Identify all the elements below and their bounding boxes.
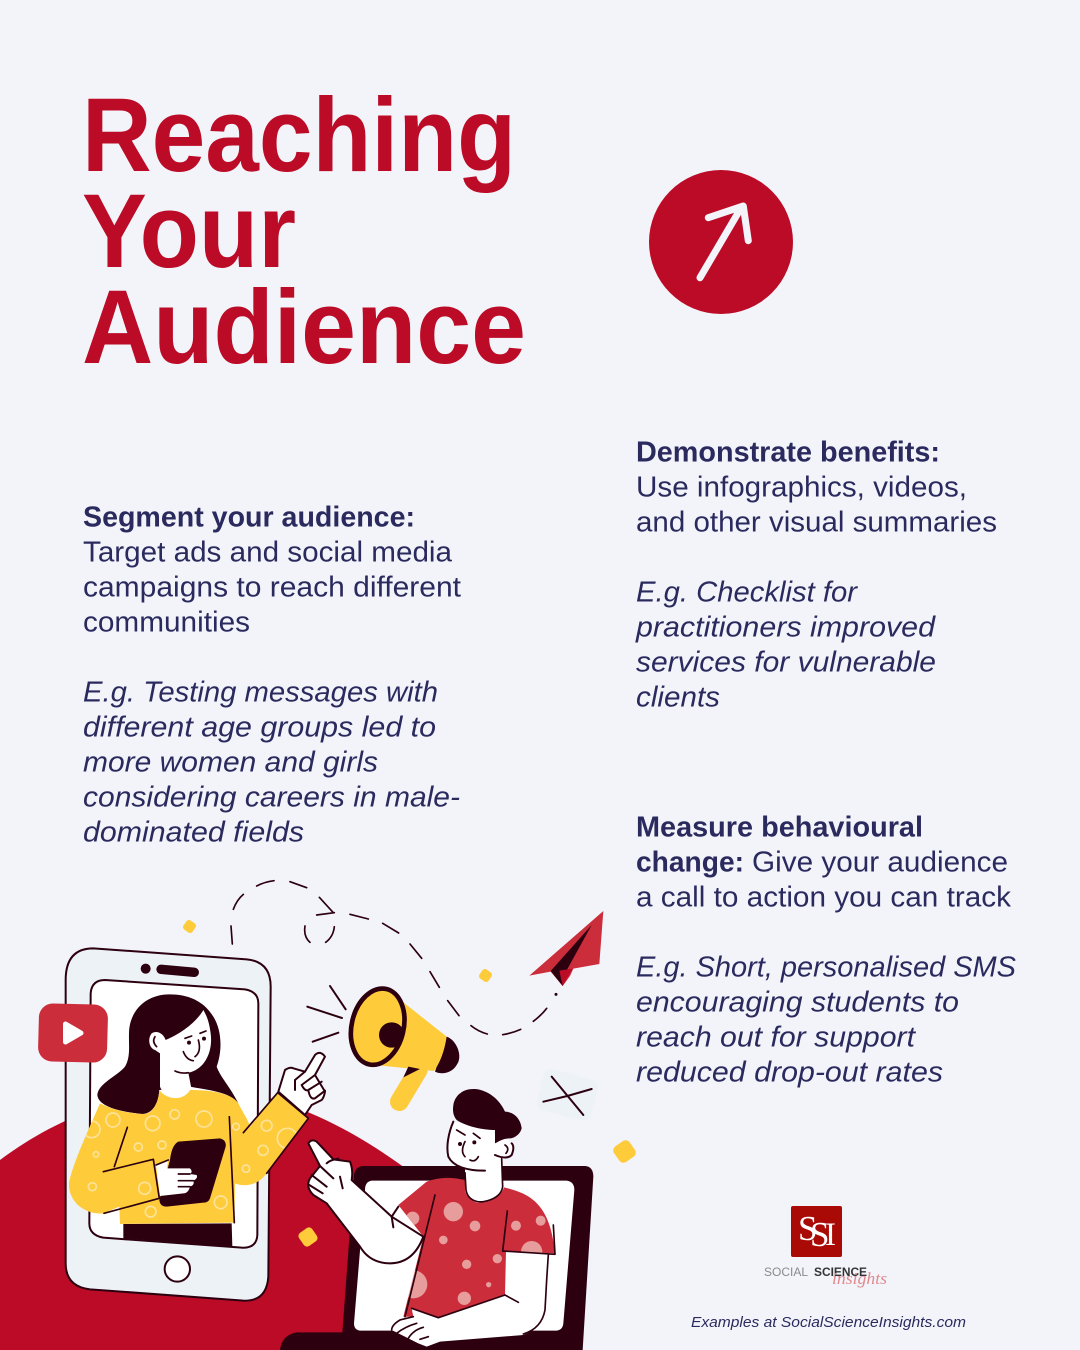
title: Your [82, 173, 296, 290]
text block: segment your audience: different age groups led to [83, 712, 436, 744]
text block: demonstrate benefits: Demonstrate benefits: [636, 436, 940, 468]
icon: video play badge [38, 1003, 108, 1063]
text block: segment your audience: E.g. Testing messages with [83, 676, 438, 708]
man figure [308, 1089, 555, 1347]
illustration: dashed flight path [231, 881, 557, 1035]
monitor frame [280, 1166, 593, 1350]
text block: segment your audience [83, 502, 461, 848]
icon: arrow in red circle [649, 170, 793, 314]
icon: envelope [535, 1067, 600, 1123]
text block: segment your audience: considering careers in male- [83, 782, 460, 814]
sound lines [307, 986, 346, 1042]
text block: segment your audience: communities [83, 606, 250, 638]
text block: segment your audience: dominated fields [83, 816, 304, 848]
phone screen [89, 980, 258, 1248]
logo: Social Science Insights: SCIENCE [814, 1265, 867, 1279]
text block: demonstrate benefits: services for vulnerable [636, 646, 936, 678]
text block: measure behavioural change: Measure behavioural [636, 812, 923, 844]
monitor screen [354, 1181, 574, 1331]
illustration: phone and woman [66, 948, 325, 1301]
logo: Social Science Insights [764, 1206, 887, 1288]
phone body [66, 948, 271, 1301]
phone home button [165, 1256, 190, 1282]
text block: segment your audience: more women and girls [83, 746, 378, 778]
text block: measure behavioural change: a call to action you can track [636, 882, 1012, 914]
text block: measure behavioural change: encouraging students to [636, 986, 959, 1018]
title: Audience [82, 269, 526, 386]
logo: Social Science Insights: S [798, 1209, 817, 1248]
logo: Social Science Insights: S [810, 1215, 829, 1254]
illustration: man at monitor [280, 1089, 593, 1350]
text block: demonstrate benefits: clients [636, 682, 720, 714]
text block: measure behavioural change: Give your audience [752, 846, 1008, 878]
phone camera and speaker [141, 964, 194, 974]
text block: measure behavioural change: E.g. Short, personalised SMS [636, 952, 1016, 984]
decorative yellow dots [182, 919, 638, 1248]
text block: segment your audience: campaigns to reach different [83, 572, 461, 604]
title [82, 77, 526, 386]
text block: measure behavioural change: reach out for support [636, 1022, 916, 1054]
text block: measure behavioural change [636, 812, 1016, 1088]
logo: Social Science Insights: insights [832, 1269, 887, 1288]
text block: measure behavioural change: reduced drop-out rates [636, 1056, 943, 1088]
logo: Social Science Insights: SOCIAL [764, 1265, 808, 1279]
text block: segment your audience: Segment your audience: [83, 502, 415, 534]
logo: Social Science Insights: I [825, 1217, 836, 1253]
icon: megaphone [344, 983, 459, 1102]
text block: segment your audience: Target ads and social media [83, 536, 452, 568]
text block: demonstrate benefits [635, 436, 997, 714]
footer source line: Examples at SocialScienceInsights.com [691, 1314, 966, 1331]
text block: measure behavioural change: change: [636, 846, 744, 878]
text block: demonstrate benefits: practitioners improved [635, 612, 936, 644]
woman figure [69, 994, 325, 1247]
text block: demonstrate benefits: Use infographics, videos, [636, 472, 967, 504]
title: Reaching [82, 77, 516, 194]
text block: demonstrate benefits: E.g. Checklist for [636, 576, 859, 608]
text block: demonstrate benefits: and other visual summaries [636, 506, 997, 538]
red background blob [0, 1088, 405, 1350]
icon: paper plane [529, 911, 603, 986]
